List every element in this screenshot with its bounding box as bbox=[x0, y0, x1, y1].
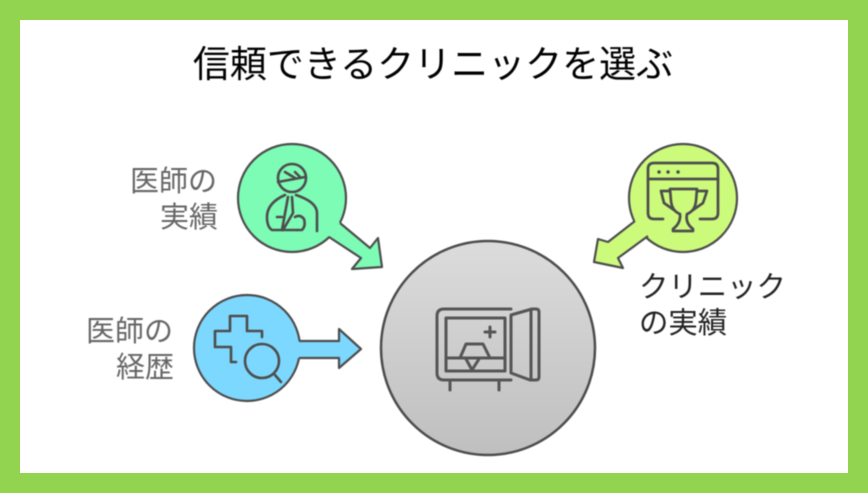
title: 信頼できるクリニックを選ぶ bbox=[193, 44, 673, 85]
label: clinic's track record: クリニック bbox=[639, 271, 786, 304]
label: doctor's track record bbox=[130, 165, 218, 234]
label: doctor's career: 経歴 bbox=[116, 351, 174, 384]
icon: medical cross with magnifier bbox=[215, 316, 281, 382]
label: doctor's career bbox=[86, 315, 174, 384]
icon: open safe bbox=[437, 309, 539, 390]
green circle and arrow bbox=[238, 144, 382, 269]
lime circle and arrow bbox=[594, 144, 737, 268]
label: doctor's career: 医師の bbox=[86, 315, 173, 348]
blue circle and arrow bbox=[194, 295, 361, 401]
label: clinic's track record bbox=[639, 271, 786, 340]
label: clinic's track record: の実績 bbox=[639, 307, 727, 340]
icon: injured person bbox=[267, 164, 317, 231]
label: doctor's track record: 医師の bbox=[130, 165, 217, 198]
icon: trophy on browser window bbox=[648, 163, 718, 231]
label: doctor's track record: 実績 bbox=[160, 201, 218, 234]
center circle: safe icon bbox=[381, 241, 595, 455]
